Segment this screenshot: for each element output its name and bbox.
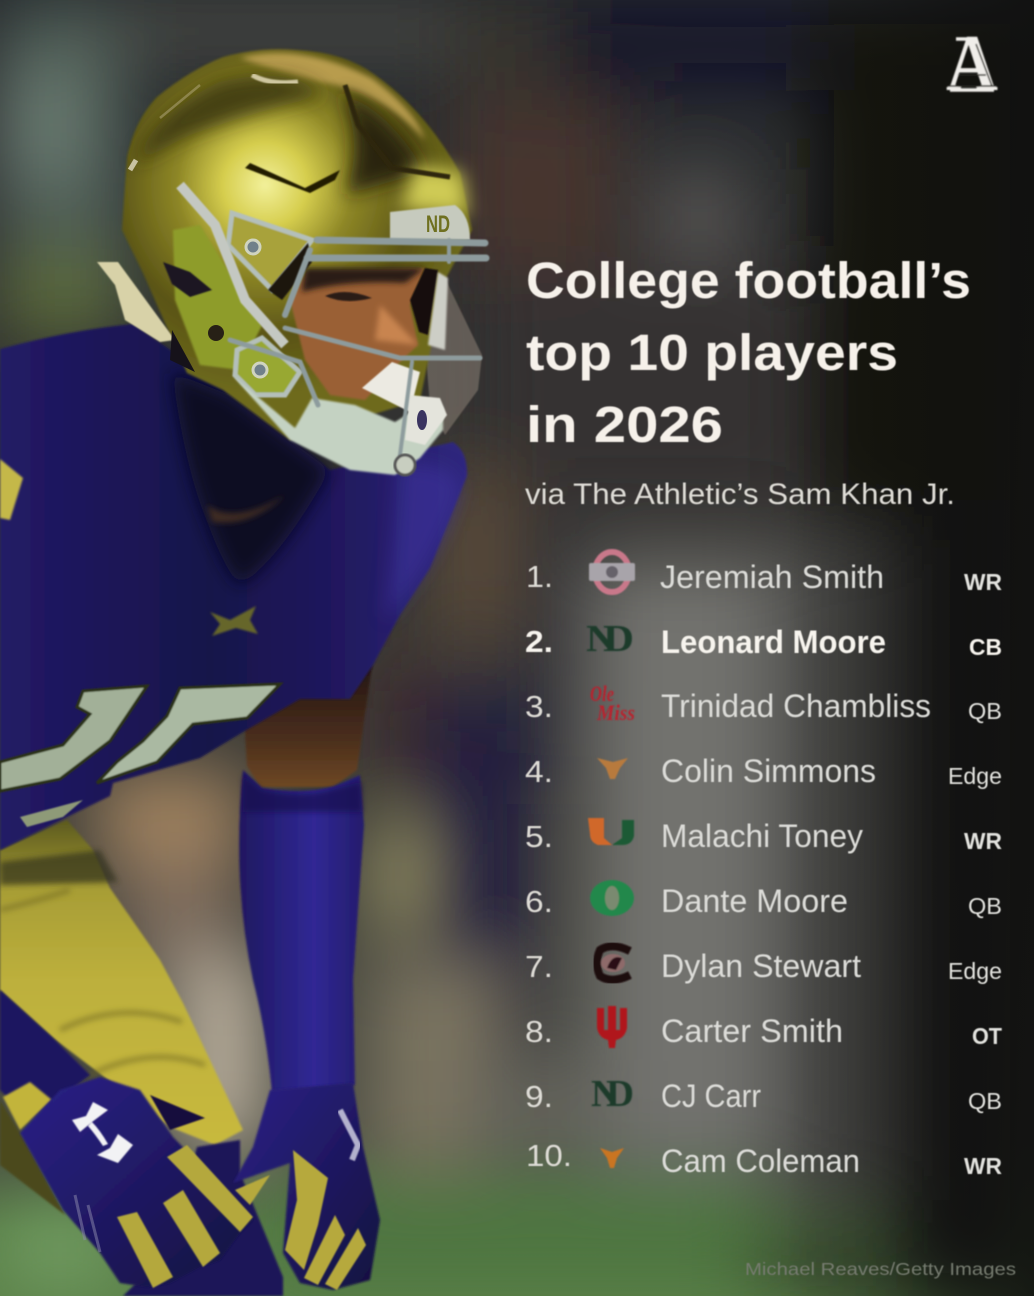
photo credit: Michael Reaves/Getty Images — [745, 1259, 1016, 1279]
row 1: WR — [964, 569, 1002, 595]
row 2: 2. — [525, 624, 553, 659]
right glove finger pads — [235, 1150, 366, 1290]
lower left arm — [0, 990, 90, 1120]
row 4: Edge — [948, 763, 1002, 789]
row 3: QB — [968, 698, 1002, 724]
row 6: QB — [968, 893, 1002, 919]
front frame arm — [180, 185, 285, 345]
sleeve top band — [243, 775, 362, 812]
icon: Texas longhorn — [597, 758, 628, 779]
icon: South Carolina — [597, 946, 630, 980]
collar number fragment — [0, 459, 23, 520]
row 10 — [526, 1138, 1002, 1179]
front frame panels — [228, 213, 312, 290]
helmet — [97, 49, 486, 475]
dark reflection — [340, 92, 425, 195]
helmet shell — [122, 49, 472, 440]
inner padding — [428, 272, 448, 350]
left glove — [20, 1077, 253, 1288]
row 1: Jeremiah Smith — [660, 559, 884, 595]
row 7: 7. — [525, 949, 553, 984]
row 10: WR — [964, 1153, 1002, 1179]
icon: Notre Dame: D — [603, 618, 634, 660]
row 6: Dante Moore — [661, 883, 848, 919]
helmet seam — [345, 85, 450, 177]
row 8: Carter Smith — [661, 1013, 843, 1049]
right glove — [233, 1083, 380, 1290]
neck shadow — [172, 372, 330, 585]
row 8 — [525, 1013, 1002, 1049]
icon: Miami U — [588, 818, 634, 845]
jersey torso — [0, 324, 467, 850]
row 10: Cam Coleman — [661, 1143, 860, 1179]
face — [290, 268, 425, 400]
row 8: 8. — [525, 1014, 553, 1049]
row 3: 3. — [525, 689, 553, 724]
neck skin sliver — [207, 495, 285, 523]
title: College football’s — [526, 252, 971, 309]
forearm sleeve — [239, 770, 364, 1092]
row 9: QB — [968, 1088, 1002, 1114]
row 5: WR — [964, 828, 1002, 854]
icon: Ole Miss: Miss — [596, 700, 635, 725]
dark hair side — [410, 268, 438, 335]
chin cup — [405, 395, 447, 445]
title: top 10 players — [526, 324, 898, 381]
row 5: 5. — [525, 819, 553, 854]
row 5: Malachi Toney — [661, 818, 863, 854]
row 1 — [526, 559, 1002, 595]
icon: Texas longhorn 2 — [600, 1148, 624, 1168]
ranking list — [525, 552, 1002, 1179]
gold crown sheen — [240, 53, 425, 140]
row 10: 10. — [526, 1138, 572, 1173]
row 7: Edge — [948, 958, 1002, 984]
bare upper arm — [243, 665, 372, 787]
row 2: Leonard Moore — [661, 624, 886, 660]
icon: Notre Dame 2: D — [606, 1073, 634, 1115]
player figure — [0, 49, 486, 1296]
ND helmet badge: ND — [426, 211, 450, 238]
helmet side panel — [173, 225, 262, 370]
icon: Indiana — [597, 1006, 627, 1048]
icon: Ohio State — [589, 552, 635, 592]
rear visor clip — [97, 262, 175, 342]
row 2: CB — [969, 634, 1002, 660]
glove finger pads — [117, 1145, 253, 1288]
gold wristband — [3, 1082, 52, 1130]
sleeve highlight — [385, 464, 460, 620]
forehead bumper — [390, 205, 470, 240]
row 3: Trinidad Chambliss — [661, 688, 931, 724]
icon: Notre Dame: N — [586, 618, 616, 660]
row 4 — [525, 753, 1002, 789]
ear slot — [163, 262, 212, 297]
brand logo on glove — [72, 1102, 133, 1163]
jersey logo — [210, 606, 258, 636]
row 4: 4. — [525, 754, 553, 789]
jersey number 15 — [0, 684, 280, 827]
row 7 — [525, 948, 1002, 984]
icon: Notre Dame — [586, 618, 634, 660]
icon: Oregon O — [590, 880, 634, 916]
visor — [425, 268, 482, 435]
icon: Ole Miss: Ole — [590, 681, 614, 706]
icon: Notre Dame 2: N — [591, 1073, 619, 1115]
row 9: CJ Carr — [661, 1078, 761, 1114]
dark shin strip — [0, 1100, 65, 1215]
pants — [0, 820, 243, 1145]
icon: Notre Dame 2 — [591, 1073, 634, 1115]
row 6 — [525, 883, 1002, 919]
row 9 — [525, 1078, 1002, 1114]
snap — [395, 455, 415, 475]
glove cuff detail — [150, 1095, 205, 1130]
row 2 — [525, 624, 1002, 660]
title: in 2026 — [526, 396, 723, 453]
row 7: Dylan Stewart — [661, 948, 861, 984]
row 6: 6. — [525, 884, 553, 919]
subtitle: via The Athletic’s Sam Khan Jr. — [525, 478, 955, 511]
chin guard — [232, 375, 443, 475]
row 5 — [525, 818, 1002, 854]
mouth guard — [362, 362, 420, 412]
row 4: Colin Simmons — [661, 753, 876, 789]
title — [526, 252, 971, 453]
row 3 — [525, 688, 1002, 724]
row 8: OT — [972, 1023, 1002, 1049]
icon: Ole Miss — [590, 681, 635, 725]
row 1: 1. — [526, 559, 553, 594]
facemask bars — [230, 240, 486, 455]
lower leg — [123, 1140, 283, 1296]
bright right highlight — [400, 165, 468, 215]
row 9: 9. — [525, 1079, 553, 1114]
The Athletic logo: A — [946, 20, 998, 108]
helmet chevron — [245, 163, 340, 193]
